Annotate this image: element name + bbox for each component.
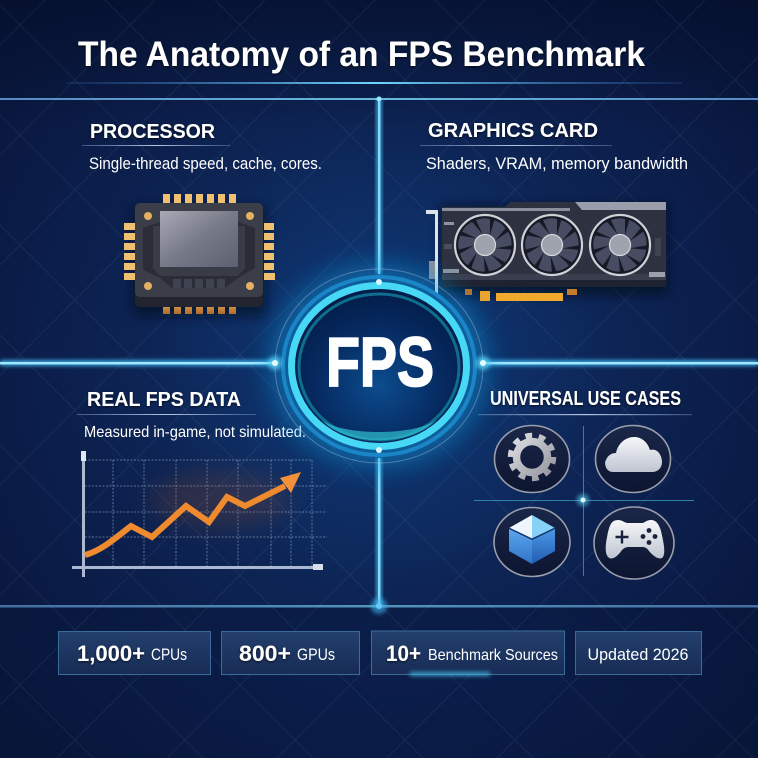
panel: real fps data — [72, 388, 327, 577]
heading: processor: PROCESSOR — [90, 120, 215, 143]
icon: gear — [494, 426, 570, 492]
icon: graphics card — [426, 202, 668, 301]
stat: updated: Updated 2026 — [588, 645, 688, 664]
text: real fps description: Measured in-game, not simulated. — [84, 424, 306, 441]
stat: gpus: 800+ — [239, 641, 291, 666]
stat: gpus: GPUs — [297, 646, 335, 664]
stat: updated — [576, 632, 702, 674]
stat: benchmark sources: Benchmark Sources — [428, 647, 558, 664]
icon: game controller — [594, 507, 674, 579]
icon: cloud — [596, 426, 670, 492]
panel: processor — [82, 120, 322, 317]
heading: real fps data: REAL FPS DATA — [87, 388, 241, 411]
stat: benchmark sources: 10+ — [386, 641, 421, 666]
heading: universal use cases: UNIVERSAL USE CASES — [490, 388, 681, 410]
stat: benchmark sources — [372, 631, 564, 676]
crosshair divider — [474, 426, 694, 576]
line chart — [72, 451, 327, 577]
stats row — [58, 631, 702, 676]
title: The Anatomy of an FPS Benchmark — [78, 35, 646, 74]
panel: graphics card — [420, 119, 688, 301]
icon: cube — [494, 508, 570, 576]
text: processor description: Single-thread speed, cache, cores. — [89, 155, 322, 173]
icon: cpu chip — [124, 194, 275, 317]
central fps badge — [268, 264, 490, 468]
text: graphics card description: Shaders, VRAM, memory bandwidth — [426, 155, 688, 173]
stat: cpus: CPUs — [151, 646, 187, 664]
text: fps: FPS — [326, 323, 434, 401]
stat: gpus — [222, 632, 360, 674]
heading: graphics card: GRAPHICS CARD — [428, 119, 598, 142]
frame lines — [0, 82, 758, 614]
panel: universal use cases — [474, 388, 694, 579]
stat: cpus — [58, 632, 210, 674]
stat: cpus: 1,000+ — [77, 641, 145, 666]
